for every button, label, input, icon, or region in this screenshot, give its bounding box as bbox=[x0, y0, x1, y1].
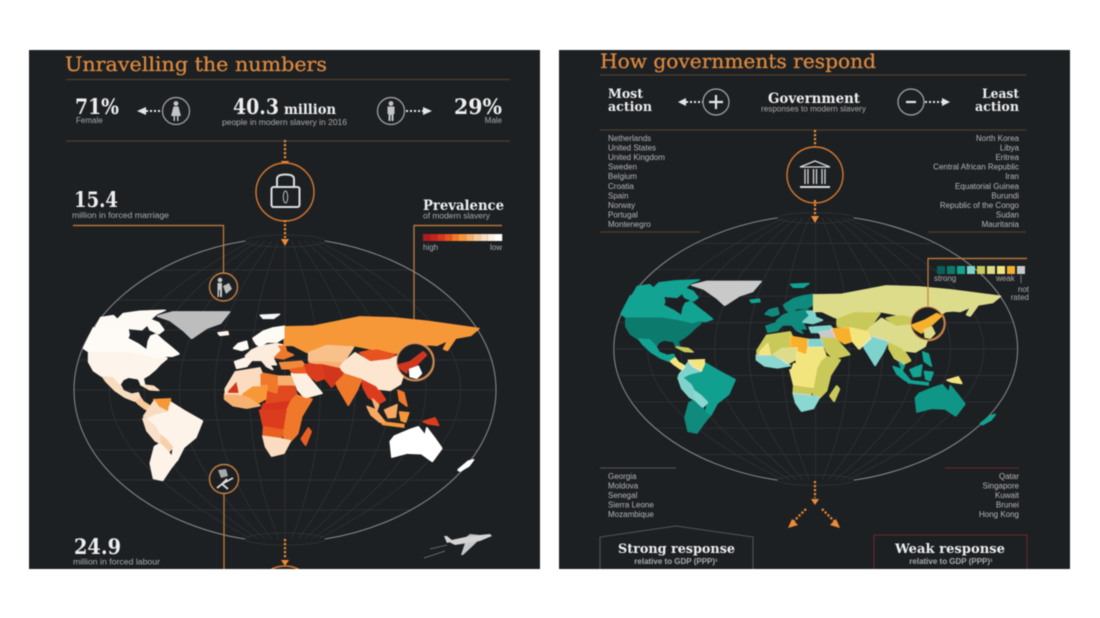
legend: prevalence scale: high bbox=[423, 243, 438, 252]
panel: unravelling the numbers bbox=[29, 50, 540, 618]
list: most action countries: United States bbox=[608, 144, 656, 152]
list: most action countries: Netherlands bbox=[608, 134, 651, 143]
callout line: prevalence bbox=[414, 226, 502, 323]
icon: woman bbox=[162, 98, 190, 124]
arrow: down to lock bbox=[281, 140, 289, 168]
heading: prevalence legend: of modern slavery bbox=[423, 212, 490, 220]
stat: forced labour bbox=[72, 537, 160, 566]
box: strong response bbox=[600, 526, 753, 569]
list: weak response countries: Hong Kong bbox=[979, 510, 1019, 519]
list: strong response countries: Georgia bbox=[608, 472, 637, 481]
legend: prevalence scale: low bbox=[490, 243, 502, 252]
list: most action countries: Belgium bbox=[608, 172, 637, 181]
arrow: towards female share bbox=[137, 107, 163, 115]
list: least action countries: Burundi bbox=[991, 191, 1019, 200]
heading: most action: action bbox=[608, 100, 653, 115]
list: weak response countries: Brunei bbox=[996, 501, 1019, 510]
graticule globe bbox=[74, 235, 496, 545]
heading: least action bbox=[975, 87, 1020, 115]
stat: female share: Female bbox=[76, 116, 103, 125]
box: weak response: Weak response bbox=[894, 542, 1005, 557]
list: strong response countries bbox=[600, 468, 676, 519]
arrow: towards male share bbox=[406, 107, 432, 115]
list: least action countries: Libya bbox=[1000, 144, 1020, 152]
callout line: forced labour bbox=[223, 494, 225, 569]
list: most action countries: Portugal bbox=[608, 210, 638, 219]
heading: government bbox=[761, 91, 866, 114]
stat: total in modern slavery: people in modern slavery in 2016 bbox=[222, 118, 348, 127]
stat: total in modern slavery: 40.3 bbox=[233, 94, 279, 119]
box: weak response: relative to GDP (PPP)¹ bbox=[909, 557, 993, 566]
arrow: globe to next section bbox=[281, 539, 289, 566]
icon: next section circle bbox=[270, 564, 300, 570]
heading: prevalence legend: Prevalence bbox=[423, 198, 504, 214]
stat: forced labour: million in forced labour bbox=[73, 558, 160, 566]
box: strong response: Strong response bbox=[618, 542, 735, 557]
stat: male share: 29% bbox=[454, 94, 502, 119]
heading: most action bbox=[608, 87, 653, 115]
legend: response scale: rated bbox=[1011, 293, 1029, 302]
arrow: government icon to globe bbox=[811, 200, 819, 223]
icon: forced labour bbox=[210, 464, 238, 494]
heading: most action: Most bbox=[608, 87, 643, 102]
box: strong response: relative to GDP (PPP)¹ bbox=[634, 557, 718, 566]
list: least action countries: Mauritania bbox=[982, 220, 1020, 229]
arrow: towards most action bbox=[678, 98, 703, 106]
inset: Korean peninsula bbox=[911, 306, 945, 340]
legend: response scale: strong bbox=[934, 274, 956, 283]
icon: forced marriage bbox=[210, 273, 238, 301]
list: weak response countries: Kuwait bbox=[995, 491, 1020, 500]
list: strong response countries: Sierra Leone bbox=[608, 501, 654, 510]
list: least action countries: Iran bbox=[1005, 172, 1019, 181]
stat: forced marriage bbox=[72, 187, 170, 220]
list: weak response countries: Singapore bbox=[983, 482, 1020, 490]
map: prevalence of modern slavery bbox=[83, 310, 479, 481]
map: government responses bbox=[621, 280, 1001, 433]
stat: total in modern slavery bbox=[222, 94, 348, 127]
list: least action countries: Sudan bbox=[996, 210, 1019, 219]
stat: forced marriage: million in forced marriage bbox=[72, 211, 170, 220]
list: least action countries: Central African Republic bbox=[933, 163, 1019, 172]
callout line: response legend bbox=[928, 258, 1027, 307]
icon: plus bbox=[703, 89, 729, 115]
list: least action countries: North Korea bbox=[976, 134, 1020, 143]
callout line: forced marriage bbox=[73, 226, 224, 273]
legend: prevalence scale bbox=[423, 234, 502, 252]
list: strong response countries: Senegal bbox=[608, 491, 638, 500]
stat: forced labour: 24.9 bbox=[74, 534, 121, 559]
title: Unravelling the numbers bbox=[65, 53, 327, 76]
legend: response scale: weak bbox=[995, 274, 1016, 283]
list: weak response countries: Qatar bbox=[999, 472, 1019, 481]
list: least action countries bbox=[933, 134, 1020, 229]
stat: male share: Male bbox=[485, 116, 503, 125]
title: How governments respond bbox=[600, 50, 876, 73]
stat: total in modern slavery: million bbox=[284, 102, 336, 118]
heading: least action: Least bbox=[982, 87, 1019, 102]
stat: female share bbox=[76, 97, 120, 124]
box: weak response bbox=[874, 535, 1027, 569]
icon: man bbox=[378, 98, 404, 124]
heading: government: responses to modern slavery bbox=[761, 104, 866, 114]
heading: prevalence legend bbox=[423, 198, 504, 220]
arrow: down to government icon bbox=[811, 130, 819, 154]
list: most action countries: Spain bbox=[608, 191, 628, 200]
stat: female share: 71% bbox=[75, 94, 119, 119]
icon: plane bbox=[424, 534, 492, 558]
stat: forced marriage: 15.4 bbox=[74, 187, 118, 212]
list: least action countries: Equatorial Guinea bbox=[955, 182, 1020, 191]
list: weak response countries bbox=[945, 468, 1020, 519]
panel: how governments respond bbox=[559, 50, 1070, 569]
arrow: split to strong and weak bbox=[788, 481, 840, 528]
list: most action countries bbox=[608, 134, 665, 229]
legend: response scale bbox=[934, 266, 1030, 302]
arrow: towards least action bbox=[925, 98, 950, 106]
heading: government: Government bbox=[768, 91, 861, 107]
list: most action countries: Croatia bbox=[608, 182, 634, 191]
list: most action countries: Montenegro bbox=[608, 220, 651, 229]
icon: lock bbox=[256, 163, 314, 221]
icon: minus bbox=[898, 89, 924, 115]
heading: least action: action bbox=[975, 100, 1020, 115]
icon: government building bbox=[787, 147, 843, 203]
list: least action countries: Republic of the Congo bbox=[940, 201, 1020, 210]
list: most action countries: United Kingdom bbox=[608, 153, 665, 162]
list: strong response countries: Moldova bbox=[608, 482, 639, 490]
inset: Korean peninsula bbox=[396, 343, 434, 380]
legend: response scale: not bbox=[1018, 285, 1030, 294]
list: least action countries: Eritrea bbox=[995, 153, 1020, 162]
list: strong response countries: Mozambique bbox=[608, 510, 654, 519]
arrow: lock to globe bbox=[281, 220, 289, 246]
list: most action countries: Norway bbox=[608, 201, 635, 210]
graticule globe bbox=[614, 213, 1018, 485]
list: most action countries: Sweden bbox=[608, 163, 637, 172]
